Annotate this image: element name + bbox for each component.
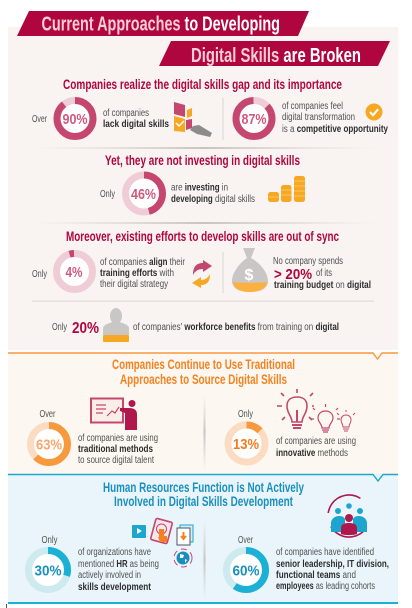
stat: 87 percent competitive opportunity <box>236 100 388 136</box>
stat: 13 percent innovative methods <box>228 409 356 462</box>
icon: light bulbs <box>277 389 355 432</box>
icon: money bag <box>232 248 268 292</box>
stat: 60 percent cohorts: functional teams and <box>276 570 356 581</box>
panel: traditional approaches <box>8 353 398 474</box>
stat: 63 percent traditional methods: traditional methods <box>78 444 153 455</box>
icon: orange check badge <box>366 104 382 120</box>
divider <box>32 147 377 149</box>
title banner: line one: Current Approaches to Developing <box>42 14 280 36</box>
stat: 90 percent lack digital skills: Over <box>32 114 47 125</box>
stat: no company spends over 20 percent: No company spends <box>273 256 343 267</box>
divider <box>204 520 206 600</box>
icon: tiles and hand <box>174 102 212 137</box>
stat: no company spends over 20 percent: of its <box>316 268 332 279</box>
stat: 63 percent traditional methods <box>30 409 158 466</box>
title banner: line two: Digital Skills are Broken <box>191 45 361 67</box>
stat: 20 percent workforce benefits: of companies' workforce benefits from training on digital <box>133 322 339 333</box>
stat: 46 percent investing <box>100 175 255 212</box>
stat: 63 percent traditional methods: of companies are using <box>78 433 158 444</box>
stat: 46 percent investing: are investing in <box>171 182 228 194</box>
icon: worker <box>103 308 129 342</box>
heading: traditional approaches: Companies Continue to Use Traditional <box>112 357 295 372</box>
stat: 90 percent lack digital skills: of companies <box>103 108 149 119</box>
icon: documents <box>177 525 193 545</box>
donut: 87%: 87% <box>242 111 266 128</box>
stat: 60 percent cohorts: employees as leading cohorts <box>276 581 375 592</box>
corner mark <box>6 604 7 608</box>
stat: 4 percent align: their digital strategy <box>100 279 168 290</box>
stat: 13 percent innovative methods: of companies are using <box>276 436 356 447</box>
divider <box>204 395 206 471</box>
donut: 46% <box>126 175 162 212</box>
icon: tablet with touch <box>150 518 173 544</box>
icon: video screen <box>132 525 146 538</box>
donut: 4%: 4% <box>66 264 82 281</box>
stat: 60 percent cohorts: Over <box>238 535 253 546</box>
divider <box>222 98 224 140</box>
stat: 30 percent HR involved: mentioned HR as being <box>78 559 159 570</box>
stat: 4 percent align: Only <box>32 269 47 280</box>
stat: 4 percent align: training efforts with <box>100 268 174 279</box>
icon: globe <box>174 549 192 567</box>
stat: 30 percent HR involved: Only <box>42 535 58 546</box>
donut: 30%: 30% <box>34 562 62 580</box>
icon: coin stacks <box>268 176 305 202</box>
donut: 63%: 63% <box>36 436 62 454</box>
stat: 87 percent competitive opportunity: is a competitive opportunity <box>282 124 388 135</box>
stat: 87 percent competitive opportunity: of companies feel <box>282 101 343 112</box>
icon: presenter at board <box>91 398 137 430</box>
stat: 87 percent competitive opportunity: digital transformation <box>282 112 355 123</box>
donut: 60% <box>226 550 266 590</box>
stat: 60 percent cohorts: of companies have identified <box>276 547 374 558</box>
stat: 60 percent cohorts <box>226 535 389 592</box>
panel: digital skills are broken <box>8 11 398 350</box>
stat: 13 percent innovative methods: innovative methods <box>276 448 348 459</box>
icon: team circle <box>320 487 378 545</box>
heading: traditional approaches: Approaches to Source Digital Skills <box>120 372 287 387</box>
heading: not investing: Yet, they are not investing in digital skills <box>105 153 300 168</box>
donut: 46%: 46% <box>131 186 156 203</box>
stat: no company spends over 20 percent <box>273 256 371 291</box>
stat: 30 percent HR involved <box>28 535 159 593</box>
stat: 20 percent workforce benefits: 20% <box>72 320 99 337</box>
icon: sync arrows <box>192 260 212 288</box>
stat: 30 percent HR involved: actively involved in <box>78 570 141 581</box>
icon: money bag: $ <box>245 267 254 284</box>
stat: 63 percent traditional methods: to source digital talent <box>78 455 154 466</box>
stat: 4 percent align: of companies align their <box>100 257 186 268</box>
stat: 90 percent lack digital skills: lack digital skills <box>103 119 169 130</box>
panel: human resources <box>8 474 398 604</box>
divider <box>32 222 377 224</box>
donut: 60%: 60% <box>232 562 260 580</box>
donut: 4% <box>56 254 92 290</box>
donut: 13%: 13% <box>233 436 259 453</box>
stat: 46 percent investing: Only <box>100 189 115 200</box>
stat: 30 percent HR involved: skills development <box>78 582 152 593</box>
heading: human resources <box>103 480 304 509</box>
divider <box>32 300 374 302</box>
donut: 87% <box>236 100 272 136</box>
stat: 30 percent HR involved: of organizations have <box>78 547 151 558</box>
stat: 46 percent investing: developing digital skills <box>171 194 255 205</box>
stat: 20 percent workforce benefits <box>52 320 339 337</box>
donut: 90%: 90% <box>62 111 88 128</box>
stat: 63 percent traditional methods: Over <box>40 409 56 420</box>
heading: traditional approaches <box>112 357 295 387</box>
divider <box>222 252 224 293</box>
stat: 13 percent innovative methods: Only <box>238 409 253 420</box>
stat: 4 percent align <box>32 254 186 290</box>
stat: 20 percent workforce benefits: Only <box>52 322 67 333</box>
stat: no company spends over 20 percent: > 20% <box>274 266 312 283</box>
heading: human resources: Involved in Digital Skills Development <box>114 494 293 509</box>
stat: no company spends over 20 percent: training budget on digital <box>274 280 371 291</box>
stat: 90 percent lack digital skills <box>32 100 169 136</box>
heading: human resources: Human Resources Function is Not Actively <box>103 480 304 495</box>
